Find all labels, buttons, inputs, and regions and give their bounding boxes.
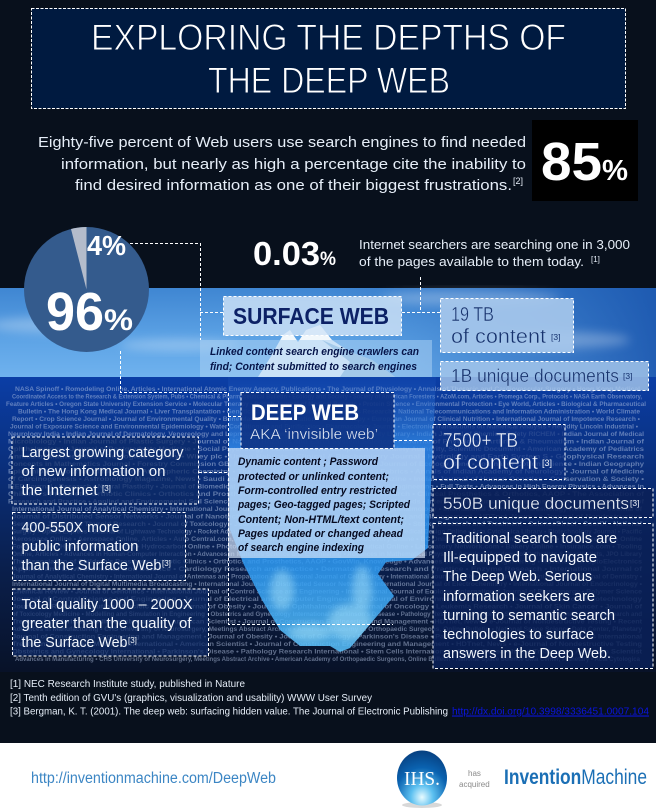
pie chart: 96% / 4%: 96 (46, 282, 104, 342)
references: [3] Bergman, K. T. (2001). The deep web: surfacing hidden value. The Journal of Electronic Publishing (10, 706, 448, 718)
has acquired text (459, 769, 490, 789)
pie chart: 96% / 4%: % (104, 304, 133, 337)
panel: surface web heading (224, 296, 402, 336)
journal name background text: Report • Crop Science Journal • Journal of Environmental Quality • Bone Marrow Transplantation • Gene Therapy • European Journal of Clinical Nutrition • International Journal of Impotence Research • (12, 416, 640, 423)
intro text: Eighty-five percent of Web users use search engines to find needed (38, 134, 526, 151)
journal name background text (6, 386, 646, 663)
journal name background text: Advances in Manufacturing • CHS University of Neurosurgery, Meetings Abstract Archive • American Academy of Orthopaedic Surgeons, Online Bulletin • National Space Science Data Center, Planetary (12, 626, 643, 633)
callout: 400-550X more: public information (22, 539, 138, 555)
panel: traditional search tools: Ill-equipped to navigate (443, 550, 597, 566)
panel: 7500+ TB of content: of content (443, 452, 538, 474)
intro text: find desired information as one of their biggest frustrations. (75, 177, 512, 194)
callout: 400-550X more: 400-550X more (22, 520, 120, 536)
panel: deep content description: Content; Non-HTML/text content; (238, 514, 404, 526)
journal name background text: Journal of Control Science and Engineering • Journal of Electrical and Computer Engineering • Journal of Environmental and Public Health • Journal of Nanotechnology (12, 596, 643, 603)
panel: 19 TB of content: of content (451, 326, 546, 348)
panel: deep content description: Pages updated or changed ahead (238, 528, 403, 540)
journal name background text: of Toxicology Medicine • Modelling and Simulation in Engineering • Obstetrics and Gynecology International • Parkinson's Disease • Pathology Research International • Stem Cells International • Stroke Research and (12, 611, 642, 618)
stat: 0.03%: % (320, 249, 336, 270)
panel: linked content description: Linked content search engine crawlers can (210, 346, 419, 358)
panel: 1B unique documents: [3] (623, 371, 632, 381)
callout: total quality: [3] (128, 636, 137, 645)
journal name background text: Treatment • Veterinary Medicine International • American Scientist • Journal of Construction Engineering and Management • HDTnet, News • e-Journal of Nondestructive Testing • Recent (12, 618, 642, 626)
icon: IHS globe logo (397, 750, 447, 808)
panel: linked content description: find; Content submitted to search engines (210, 361, 417, 373)
stat: 85%: % (602, 155, 628, 187)
stat: 85% (532, 120, 638, 201)
searchers text (359, 237, 630, 269)
callout: largest growing category: of new information on (22, 464, 166, 480)
journal name background text: Food Online • Hospital Network.com • Hydrocarbon Online • Photonics Online • Water Online • Pharmaceutical Online • Laboratory Network.com • Bakery Online • Insurance.com • Tooling (12, 544, 642, 550)
journal name background text: Applied and Environmental Soil Science • Cardiology Research and Practice • Dermatology Research and Practice • Enzyme Research • International Journal of (12, 566, 643, 573)
journal name background text: Chemical Review • Journal of Genomics • International Journal of Control Science and Engineering • International Journal of Ecology • International Journal of Photoenergy • Polymer Science (12, 588, 643, 596)
journal name background text: Journal of Distributed Sensor Networks • Journal of Nanotechnology • International Journal of Engineering and Management • HDTnet, News • e-Journal of Nondestructive (12, 514, 643, 520)
panel: 7500+ TB of content: 7500+ TB (443, 430, 518, 452)
panel: 7500+ TB of content: [3] (542, 458, 552, 468)
panel: traditional search tools: The Deep Web. Serious (443, 569, 592, 585)
panel: linked content description (200, 340, 432, 377)
panel: traditional search tools (433, 524, 653, 668)
panel: deep content description: Dynamic content ; Password (238, 456, 378, 468)
references: [1] NEC Research Institute study, published in Nature (10, 678, 245, 690)
callout: total quality: greater than the quality of (22, 616, 192, 632)
journal name background text: Children's Prosthetic-Orthotic Clinics • Orthotics and Prosthetics, AAOP • GovWin • Biomedical Research • Clinical Prosthetics & Orthotics, AAOP • The Association of (8, 491, 645, 498)
journal name background text: Journal of Construction Engineering and Management • Journal of Obesity • Journal of Oncology • Parkinson's Disease • Pathology Research International • Stem Cells International (12, 634, 642, 640)
has acquired text: acquired (459, 780, 490, 789)
journal name background text: Annals of Mathematics • Geological Society • Wiley plc • Urban Habitats • Clinical & Biochemistry Journal • Hydrology and Earth System S • Geophysical Research (8, 454, 644, 460)
connector lines (120, 244, 440, 624)
journal name background text: Advances in Manufacturing • CHS University of Neurosurgery, Meetings Abstract Archive • American Academy of Orthopaedic Surgeons, Online Bulletin • National Space Science Data Center, Planetary • Acta Cytologica (15, 656, 641, 663)
pie chart: 96% / 4%: 4% (87, 230, 126, 261)
panel: deep web heading: DEEP WEB (251, 400, 359, 425)
panel: traditional search tools: technologies to surface (443, 627, 594, 643)
journal name background text: Ophthalmology • Journal of Postgraduate Medicine • Social Psychology Foundation • The European Food Safety Authority, Scientific Document • American Academy of Pediatrics (8, 446, 645, 453)
panel: traditional search tools: Traditional search tools are (443, 531, 617, 547)
panel: traditional search tools: answers in the Deep Web. (443, 646, 611, 662)
searchers text: of the pages available to them today. (359, 254, 584, 269)
panel: deep content description: pages; Geo-tagged pages; Scripted (237, 499, 410, 511)
panel: 1B unique documents: 1B unique documents (451, 366, 619, 386)
panel: traditional search tools: turning to semantic search (443, 608, 615, 624)
panel: surface web heading: SURFACE WEB (233, 303, 389, 329)
panel: 7500+ TB of content (433, 424, 565, 480)
panel: 19 TB of content (440, 298, 574, 352)
callout: largest growing category: [3] (102, 484, 111, 493)
journal name background text: Journal of Exposure Science and Environmental Epidemiology • Water Conditioning and Purification • Pharmacology Journal • Electronic Transactions on Numerical Analysis • Heredity Lincoln Industrial • (10, 424, 638, 430)
footer band (0, 743, 656, 808)
sky and ocean (0, 288, 656, 672)
callout: largest growing category: the Internet (22, 483, 98, 499)
intro text: information, but nearly as high a percentage cite the inability to (61, 156, 526, 173)
callout: 400-550X more (12, 512, 186, 580)
callout: 400-550X more: than the Surface Web (22, 558, 162, 574)
title (32, 8, 626, 108)
panel: 550B unique documents: 550B unique documents (443, 494, 629, 513)
journal name background text: Aerospace Online • Aerospace Online, Articles • Auto Central.com, Articles • Bioresearch Online • Drug Discovery Online • EC Online • Fiber Optics Online, Articles • Food Ingredients Online (12, 536, 643, 543)
pie chart: 96% / 4% (24, 227, 149, 352)
journal name background text: Surgery • Optics Express • Journal of Lightwave Technology • Rocket Advances in Aircraft • Civil Aerospace, Rolls-Royce Group • Medical Design Online • Acta Cytologica Library • Biotechnology Journal • Pacific (12, 528, 643, 536)
panel: 550B unique documents: [3] (630, 498, 639, 508)
panel: 19 TB of content: 19 TB (451, 304, 494, 326)
intro text: [2] (513, 176, 523, 186)
callout: total quality: Total quality 1000 – 2000X (22, 597, 193, 613)
panel: traditional search tools: information seekers are (443, 589, 595, 605)
journal name background text: Journal of Radio Computing • Nucleic Acids • Journal of Obesity • Journal of Ophthalmology • Journal of Oncology • Leukemia Research • Journal of Skin Cancer • Journal of (12, 604, 643, 610)
icon: IHS globe logo: IHS. (404, 768, 440, 790)
journal name background text: Treatment • Veterinary Medicine International • American Scientist • Journal of Construction Engineering and Management • HDTnet, News • e-Journal of Nondestructive Testing (12, 641, 642, 648)
journal name background text: Microbiology • Indian Journal of Plastic Surgery • Journal of Natural Hazards and Earth System Sciences • Journal of Phytology • Arthritis & Rheumatism • Indian Journal of (8, 438, 645, 446)
journal name background text: IEEE Journal • Research • Neural Plasticity • Journal of Biomedical Science • Advances in Materials Science and Engineering • Full Texts • Advances in High Energy Physics • Advances in (8, 484, 644, 490)
stat: 85%: 85 (541, 132, 602, 192)
intro text (38, 134, 526, 194)
journal name background text: International Journal of Analytical Chemistry • International Journal of Antennas and Propagation • Journal of Ophthalmology • International Journal of Parasitology Research • Journal of (12, 506, 643, 513)
callout: 400-550X more: [3] (162, 559, 171, 568)
title: THE DEEP WEB (208, 59, 450, 101)
journal name background text: Neurology India • Indian Journal of Dermatology, Venereology and Leprology • Cutting Tool Engineering • University Library • Indian Journal of Chemical Safety RICHEM • Indian Journal of Medical (8, 431, 644, 438)
references (10, 678, 649, 718)
references: [2] Tenth edition of GVU's (graphics, visualization and usability) WWW User Survey (10, 692, 373, 704)
callout: largest growing category: Largest growing category (22, 445, 184, 461)
journal name background text: International Journal of Digital Multimedia Broadcasting • International Journal of Distributed Sensor Networks • International Journal of Electrochemistry • International Journal of Endocrinology • (12, 581, 642, 588)
journal name background text: Bulletin • The Hong Kong Medical Journal • Liver Transplantation • Genetics and Molecular Biology • Materials Research • National Telecommunications and Information Administration • World Climate (18, 408, 641, 416)
searchers text: Internet searchers are searching one in 3,000 (359, 237, 630, 252)
journal name background text: Journal of Analytical Chemistry • International Journal of Antennas and Propagation • International Journal of Cell Biology • International Journal of Chemical Engineering • International Journal of Dentistry • (12, 574, 642, 580)
callout: largest growing category (12, 437, 198, 504)
panel: deep content description (228, 448, 425, 558)
journal name background text: Research and Practice • Applied and Environmental Soil Science • Cardiology Research • Journal of Analytical Methods • International Journal of Hypertension • International Journal of (8, 498, 645, 506)
panel: deep content description: protected or unlinked content; (237, 471, 389, 483)
journal name background text: Concepts in Mathematics Journal • Forestry Commission GB, Publications • Geophysics • ACTA • The Journal of Ecology Gene • Journal of Cotton Science • Indian Geography (8, 461, 645, 468)
panel: deep web heading: AKA ‘invisible web’ (250, 426, 378, 443)
has acquired text: has (468, 769, 481, 778)
footer band: http://inventionmachine.com/DeepWeb (31, 770, 276, 787)
panel: deep content description: of search engine indexing (238, 542, 364, 554)
panel: 1B unique documents (440, 362, 648, 390)
journal name background text: of Carcinogenesis • Astrobiology Magazine, News • Saudi Journal of Kidney Diseases • Therapy Magazine • Indian Journal of Human Genetics • Conservation & Society • (8, 476, 644, 483)
journal name background text: Sensors • Journal of Thyroid Research • Journal of Toxicology • Journal of Transplantation • Journal of Pregnancy • Stroke Research and Treatment • ScienceDirect • SooriX • National (12, 521, 642, 528)
stat: 0.03%: 0.03 (253, 235, 320, 272)
journal name background text: The Association of Children's Prosthetic-Orthotic Clinics • Orthotics and Prosthetics, AAOP • GovWin, Knowledge • Advances in Mechanical Engineering • Advances in OptoElectronics (12, 558, 643, 566)
iceberg (228, 325, 436, 652)
panel: 19 TB of content: [3] (551, 332, 560, 342)
journal name background text: Epidemiology Journal of Medicine • Atmospheric Chemistry • The Journal of Engineered Fibers and Fabrics • Annals of Indian Academy of Neurology • Journal of Medicine (8, 468, 645, 476)
callout: total quality: the Surface Web (22, 635, 128, 651)
panel: deep web heading (241, 392, 394, 448)
searchers text: [1] (591, 255, 600, 264)
references: http://dx.doi.org/10.3998/3336451.0007.104 (452, 706, 649, 718)
panel: deep content description: Form-controlled entry restricted (238, 485, 397, 497)
title: EXPLORING THE DEPTHS OF (91, 16, 566, 58)
journal name background text: NASA Spinoff • Romodeling Online, Articles • International Atomic Energy Agency, Publications • The Journal of Physiology • Annals of Thoracic and Cardiovascular Surgery • Hong Kong Medical (15, 386, 640, 393)
journal name background text: Online, Articles • Advances in Human-Computer Interaction • Advances in Materials Science and Engineering • Advances in Mathematical Physics • American Academy of Orthotists & Prosthetists, JPO Library (12, 551, 643, 558)
callout: total quality (12, 589, 208, 656)
panel: 550B unique documents (433, 488, 653, 518)
journal name background text: Obstetrics and Gynecology International • Parkinson's Disease • Pathology Research International • Stem Cells International • Stroke Research and Treatment • American Scientist (12, 648, 642, 656)
journal name background text: Feature Articles • Oregon State University Extension Service • Molecular Therapy • British Journal of Medical Reports • Protein Science • Environmental Protection • Eye World, Articles • Biological & Pharmaceutical (6, 401, 646, 408)
